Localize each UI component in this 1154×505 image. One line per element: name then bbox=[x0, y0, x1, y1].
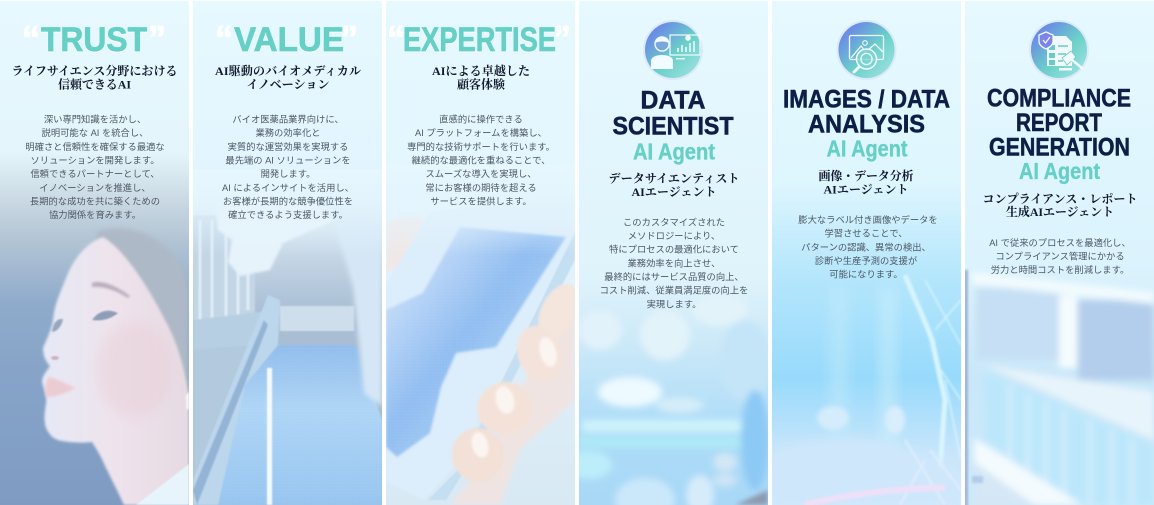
quote marks: “ bbox=[22, 18, 40, 59]
subheading: AIによる卓越した bbox=[432, 63, 530, 78]
body text: 労力と時間コストを削減します。 bbox=[991, 264, 1129, 275]
heading: DATA SCIENTIST: SCIENTIST bbox=[612, 112, 734, 140]
body text: 継続的な最適化を重ねることで、 bbox=[412, 154, 550, 166]
subheading: 画像・データ分析 bbox=[818, 168, 914, 183]
heading: COMPLIANCE REPORT GENERATION: REPORT bbox=[1016, 109, 1102, 137]
heading: COMPLIANCE REPORT GENERATION: GENERATION bbox=[989, 134, 1130, 162]
body text: 確立できるよう支援します。 bbox=[228, 209, 348, 220]
label: AI Agent: AI Agent bbox=[1019, 158, 1100, 184]
quote marks bbox=[387, 18, 571, 59]
subheading: AIエージェント bbox=[824, 182, 908, 196]
photo: blurred data network bbox=[772, 0, 961, 505]
photo: hand holding phone bbox=[386, 0, 586, 505]
body text: 業務の効率化と bbox=[255, 127, 321, 138]
quote marks: ” bbox=[553, 18, 571, 59]
heading: TRUST: TRUST bbox=[41, 21, 147, 59]
panel: compliance report generation bbox=[963, 0, 1154, 505]
icon: image analysis bbox=[836, 20, 896, 80]
subheading: 顧客体験 bbox=[457, 76, 505, 92]
body text bbox=[222, 114, 354, 220]
heading: VALUE: VALUE bbox=[234, 21, 344, 59]
photo: woman looking up bbox=[0, 0, 189, 505]
subheading: 信頼できるAI bbox=[58, 76, 131, 92]
body text: 学習させることで、 bbox=[824, 228, 908, 239]
panel: value bbox=[193, 0, 382, 505]
body text: AI で従来のプロセスを最適化し、 bbox=[989, 237, 1131, 248]
body text: スムーズな導入を実現し、 bbox=[425, 168, 537, 179]
subheading bbox=[818, 168, 914, 196]
photo: blurred circuit board bbox=[568, 0, 771, 505]
quote marks: “ bbox=[215, 18, 233, 59]
subheading bbox=[215, 63, 361, 92]
body text bbox=[600, 216, 748, 309]
body text: 最終的にはサービス品質の向上、 bbox=[604, 271, 744, 282]
subheading: コンプライアンス・レポート bbox=[982, 192, 1138, 206]
body text bbox=[25, 114, 165, 220]
quote marks: ” bbox=[340, 18, 358, 59]
panel: expertise bbox=[386, 0, 586, 505]
heading: IMAGES / DATA ANALYSIS: IMAGES / DATA bbox=[783, 86, 950, 114]
label: AI Agent: AI Agent bbox=[633, 138, 715, 164]
body text: 最先端の AI ソリューションを bbox=[225, 154, 351, 166]
heading: DATA SCIENTIST: DATA bbox=[640, 86, 706, 114]
subheading bbox=[432, 63, 530, 92]
body text: 業務効率を向上させ、 bbox=[628, 257, 720, 268]
body text: 明確さと信頼性を確保する最適な bbox=[25, 141, 165, 152]
body text: 専門的な技術サポートを行います。 bbox=[407, 141, 555, 152]
body text: パターンの認識、異常の検出、 bbox=[801, 241, 931, 252]
body text: 協力関係を育みます。 bbox=[49, 209, 141, 220]
subheading: イノベーション bbox=[246, 78, 330, 92]
subheading bbox=[982, 192, 1138, 219]
body text: コンプライアンス管理にかかる bbox=[995, 251, 1125, 262]
body text: 直感的に操作できる bbox=[439, 114, 523, 124]
subheading: データサイエンティスト bbox=[608, 172, 740, 186]
body text: 長期的な成功を共に築くための bbox=[30, 196, 160, 206]
heading: IMAGES / DATA ANALYSIS: ANALYSIS bbox=[808, 111, 925, 139]
body text: 常にお客様の期待を超える bbox=[425, 182, 537, 193]
body text: お客様が長期的な競争優位性を bbox=[223, 196, 353, 206]
body text: サービスを提供します。 bbox=[430, 196, 532, 206]
photo: blurred laboratory bbox=[963, 0, 1154, 505]
panel: trust bbox=[0, 0, 189, 505]
heading: IMAGES / DATA ANALYSIS bbox=[783, 86, 950, 139]
body text bbox=[798, 214, 938, 280]
body text: 診断や生産予測の支援が bbox=[815, 255, 918, 266]
body text bbox=[407, 114, 555, 206]
body text: バイオ医薬品業界向けに、 bbox=[232, 114, 344, 124]
heading: DATA SCIENTIST bbox=[612, 86, 734, 140]
heading: EXPERTISE: EXPERTISE bbox=[403, 21, 556, 59]
body text: AI によるインサイトを活用し、 bbox=[222, 182, 354, 193]
body text: AI プラットフォームを構築し、 bbox=[415, 127, 547, 138]
body text: コスト削減、従業員満足度の向上を bbox=[600, 285, 748, 296]
body text: 膨大なラベル付き画像やデータを bbox=[798, 214, 938, 225]
quote marks: ” bbox=[148, 18, 166, 59]
body text: 深い専門知識を活かし、 bbox=[44, 114, 146, 124]
heading: COMPLIANCE REPORT GENERATION: COMPLIANCE bbox=[987, 85, 1131, 113]
icon: data scientist bbox=[643, 20, 703, 80]
heading: TRUST: TRUST bbox=[41, 22, 147, 60]
icon: compliance checklist bbox=[1029, 20, 1089, 80]
quote marks bbox=[22, 18, 166, 59]
label: AI Agent: AI Agent bbox=[826, 136, 908, 162]
body text: このカスタマイズされた bbox=[623, 216, 725, 227]
body text bbox=[989, 237, 1131, 275]
subheading: 生成AIエージェント bbox=[1006, 204, 1114, 219]
body text: メソドロジーにより、 bbox=[628, 231, 720, 241]
quote marks: “ bbox=[387, 18, 405, 59]
body text: ソリューションを開発します。 bbox=[30, 154, 160, 166]
body text: 実質的な運営効果を実現する bbox=[228, 141, 348, 152]
body text: 実現します。 bbox=[647, 298, 701, 309]
body text: 特にプロセスの最適化において bbox=[609, 244, 739, 255]
photo: pharma production line bbox=[193, 0, 382, 505]
body text: イノベーションを推進し、 bbox=[39, 182, 151, 193]
heading: COMPLIANCE REPORT GENERATION bbox=[987, 85, 1131, 162]
subheading bbox=[608, 172, 740, 199]
body text: 可能になります。 bbox=[829, 268, 903, 280]
panel: data scientist bbox=[568, 0, 771, 505]
panel: images / data analysis bbox=[772, 0, 961, 505]
body text: 信頼できるパートナーとして、 bbox=[30, 168, 160, 179]
subheading: AIエージェント bbox=[632, 185, 716, 199]
body text: 説明可能な AI を統合し、 bbox=[42, 127, 148, 138]
heading: EXPERTISE: EXPERTISE bbox=[403, 22, 556, 60]
subheading: AI駆動のバイオメディカル bbox=[215, 63, 361, 78]
subheading bbox=[12, 63, 178, 92]
quote marks bbox=[215, 18, 358, 59]
heading: VALUE: VALUE bbox=[234, 22, 344, 60]
body text: 開発します。 bbox=[261, 168, 315, 179]
subheading: ライフサイエンス分野における bbox=[12, 63, 178, 78]
